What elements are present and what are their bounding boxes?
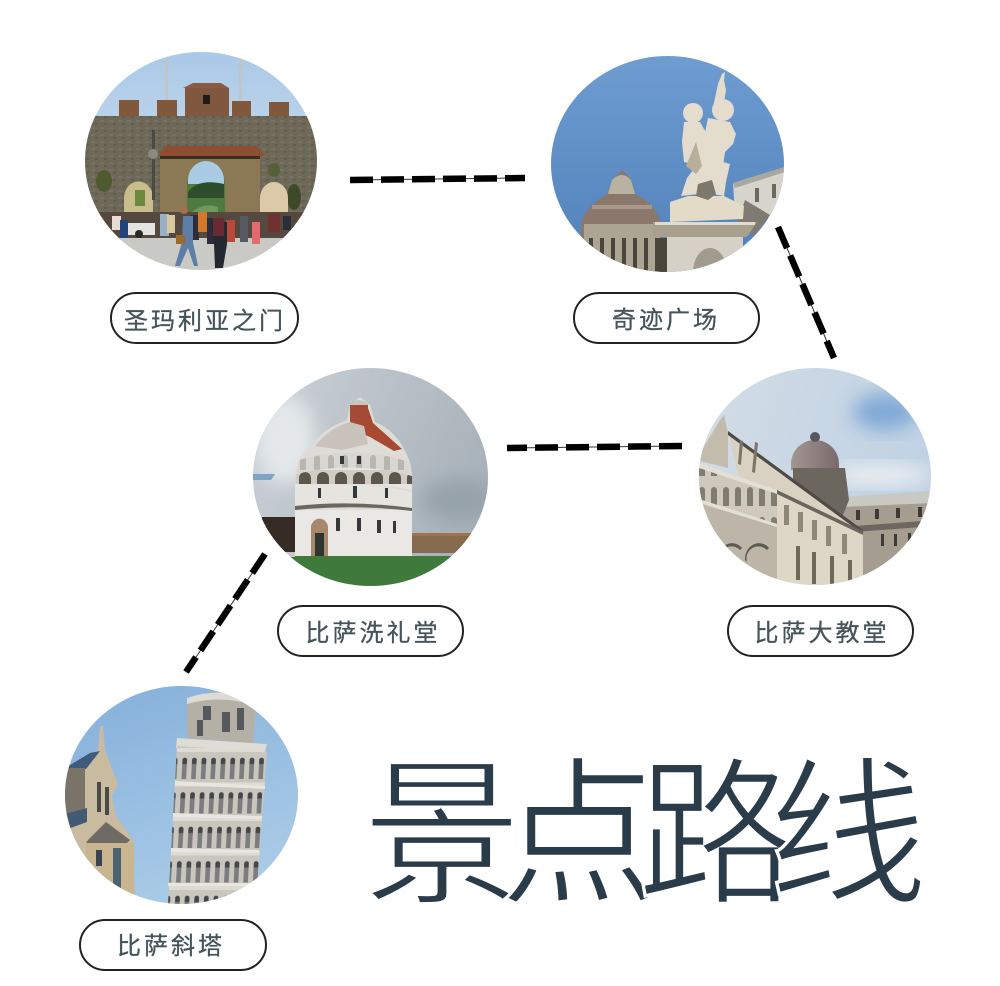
label pill: 比萨洗礼堂: 比萨洗礼堂 [306,620,440,647]
label pill: 圣玛利亚之门 [111,293,298,343]
title: 景点路线 [362,706,928,938]
arrow: route from baptistery to tower [186,554,265,672]
panel: stop 4 比萨大教堂 [696,365,936,656]
arrow: route from square to cathedral [778,227,834,358]
label pill: 奇迹广场 [574,293,759,343]
label pill: 比萨洗礼堂 [278,606,463,656]
photo: Leaning Tower of Pisa [60,683,302,907]
photo: Piazza dei Miracoli statue [548,52,788,276]
label pill: 比萨斜塔: 比萨斜塔 [117,933,225,960]
label pill: 圣玛利亚之门: 圣玛利亚之门 [124,308,286,335]
panel: stop 2 奇迹广场 [548,52,788,343]
photo: Santa Maria gate [80,48,325,273]
photo: Pisa Baptistery [250,365,500,590]
label pill: 奇迹广场: 奇迹广场 [612,307,720,334]
panel: stop 5 比萨斜塔 [60,683,302,970]
label pill: 比萨大教堂 [728,606,913,656]
arrow: route from gate to square [350,178,525,180]
label pill: 比萨斜塔 [80,920,266,970]
label pill: 比萨大教堂: 比萨大教堂 [754,620,890,647]
panel: stop 1 圣玛利亚之门 [80,48,325,343]
photo: Pisa Cathedral [696,365,936,589]
panel: stop 3 比萨洗礼堂 [250,365,500,656]
arrow: route from cathedral to baptistery [507,446,682,448]
